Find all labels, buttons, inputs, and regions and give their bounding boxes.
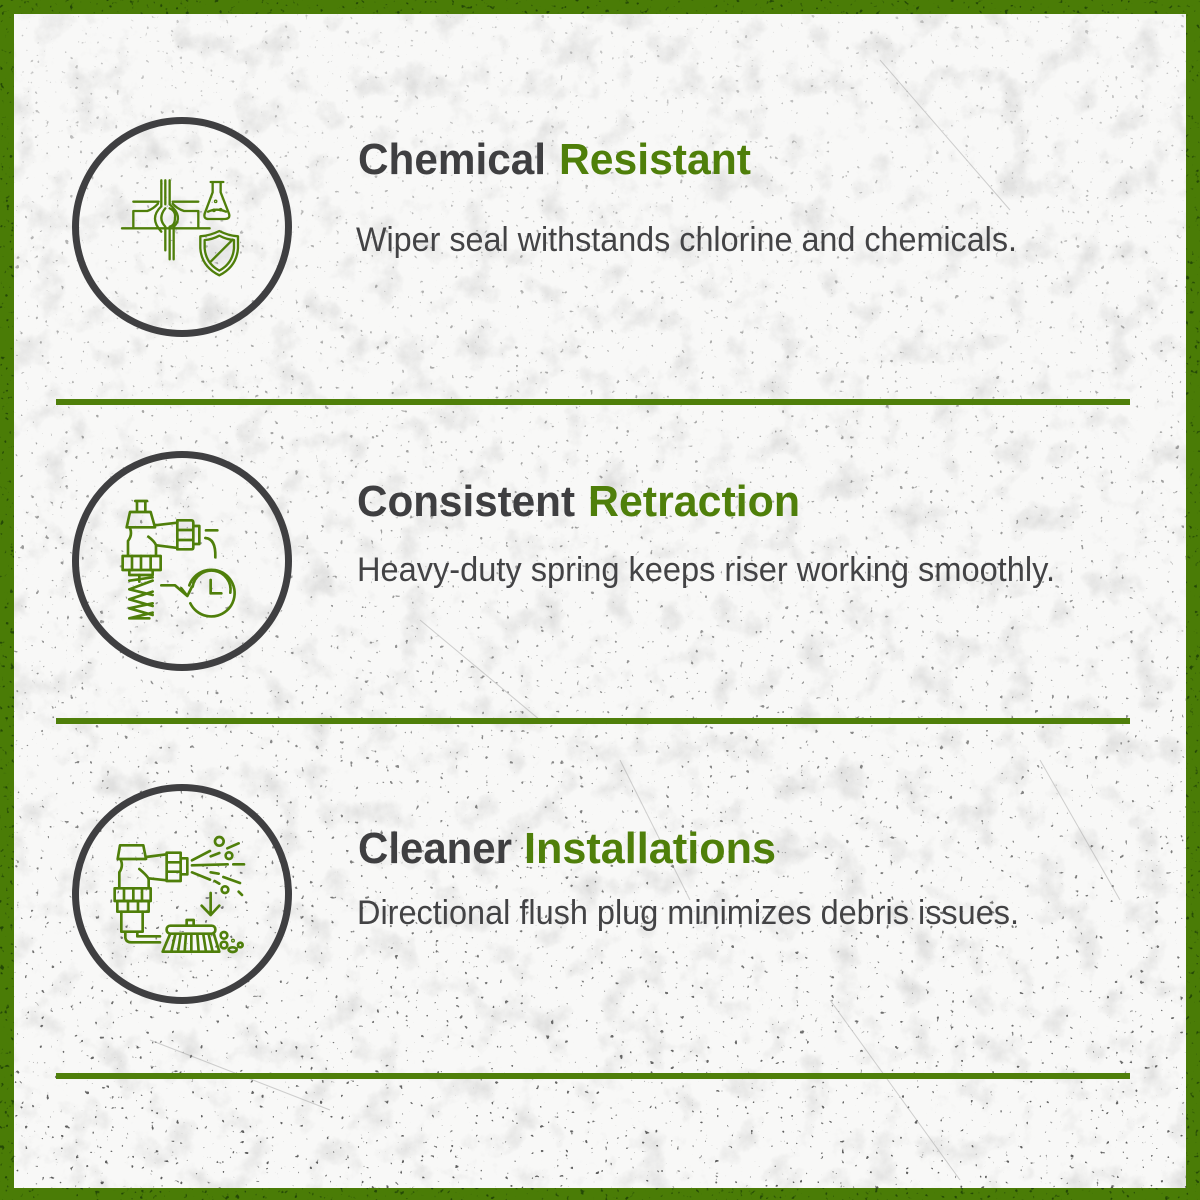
panel: consistent retraction	[76, 454, 1055, 668]
heading: consistent retraction: Retraction	[588, 477, 800, 526]
body: cleaner installations: Directional flush plug minimizes debris issues.	[357, 894, 1019, 932]
icon: chemical resistant badge	[76, 120, 288, 334]
heading: cleaner installations: Cleaner	[358, 824, 512, 873]
divider 1	[56, 399, 1130, 405]
divider 2	[56, 718, 1130, 724]
heading: consistent retraction	[357, 477, 800, 526]
heading: cleaner installations	[358, 824, 776, 873]
panel: chemical resistant	[76, 120, 1017, 334]
body: consistent retraction: Heavy-duty spring keeps riser working smoothly.	[357, 551, 1055, 589]
heading: cleaner installations: Installations	[524, 824, 776, 873]
heading: chemical resistant: Chemical	[358, 135, 546, 184]
divider 3	[56, 1073, 1130, 1079]
panel: cleaner installations	[76, 788, 1019, 1000]
body: chemical resistant: Wiper seal withstands chlorine and chemicals.	[356, 221, 1017, 259]
heading: consistent retraction: Consistent	[357, 477, 575, 526]
heading: chemical resistant	[358, 135, 751, 184]
heading: chemical resistant: Resistant	[559, 135, 751, 184]
icon: spring and clock badge	[76, 454, 288, 668]
icon: flush spray and brush badge	[76, 788, 288, 1000]
